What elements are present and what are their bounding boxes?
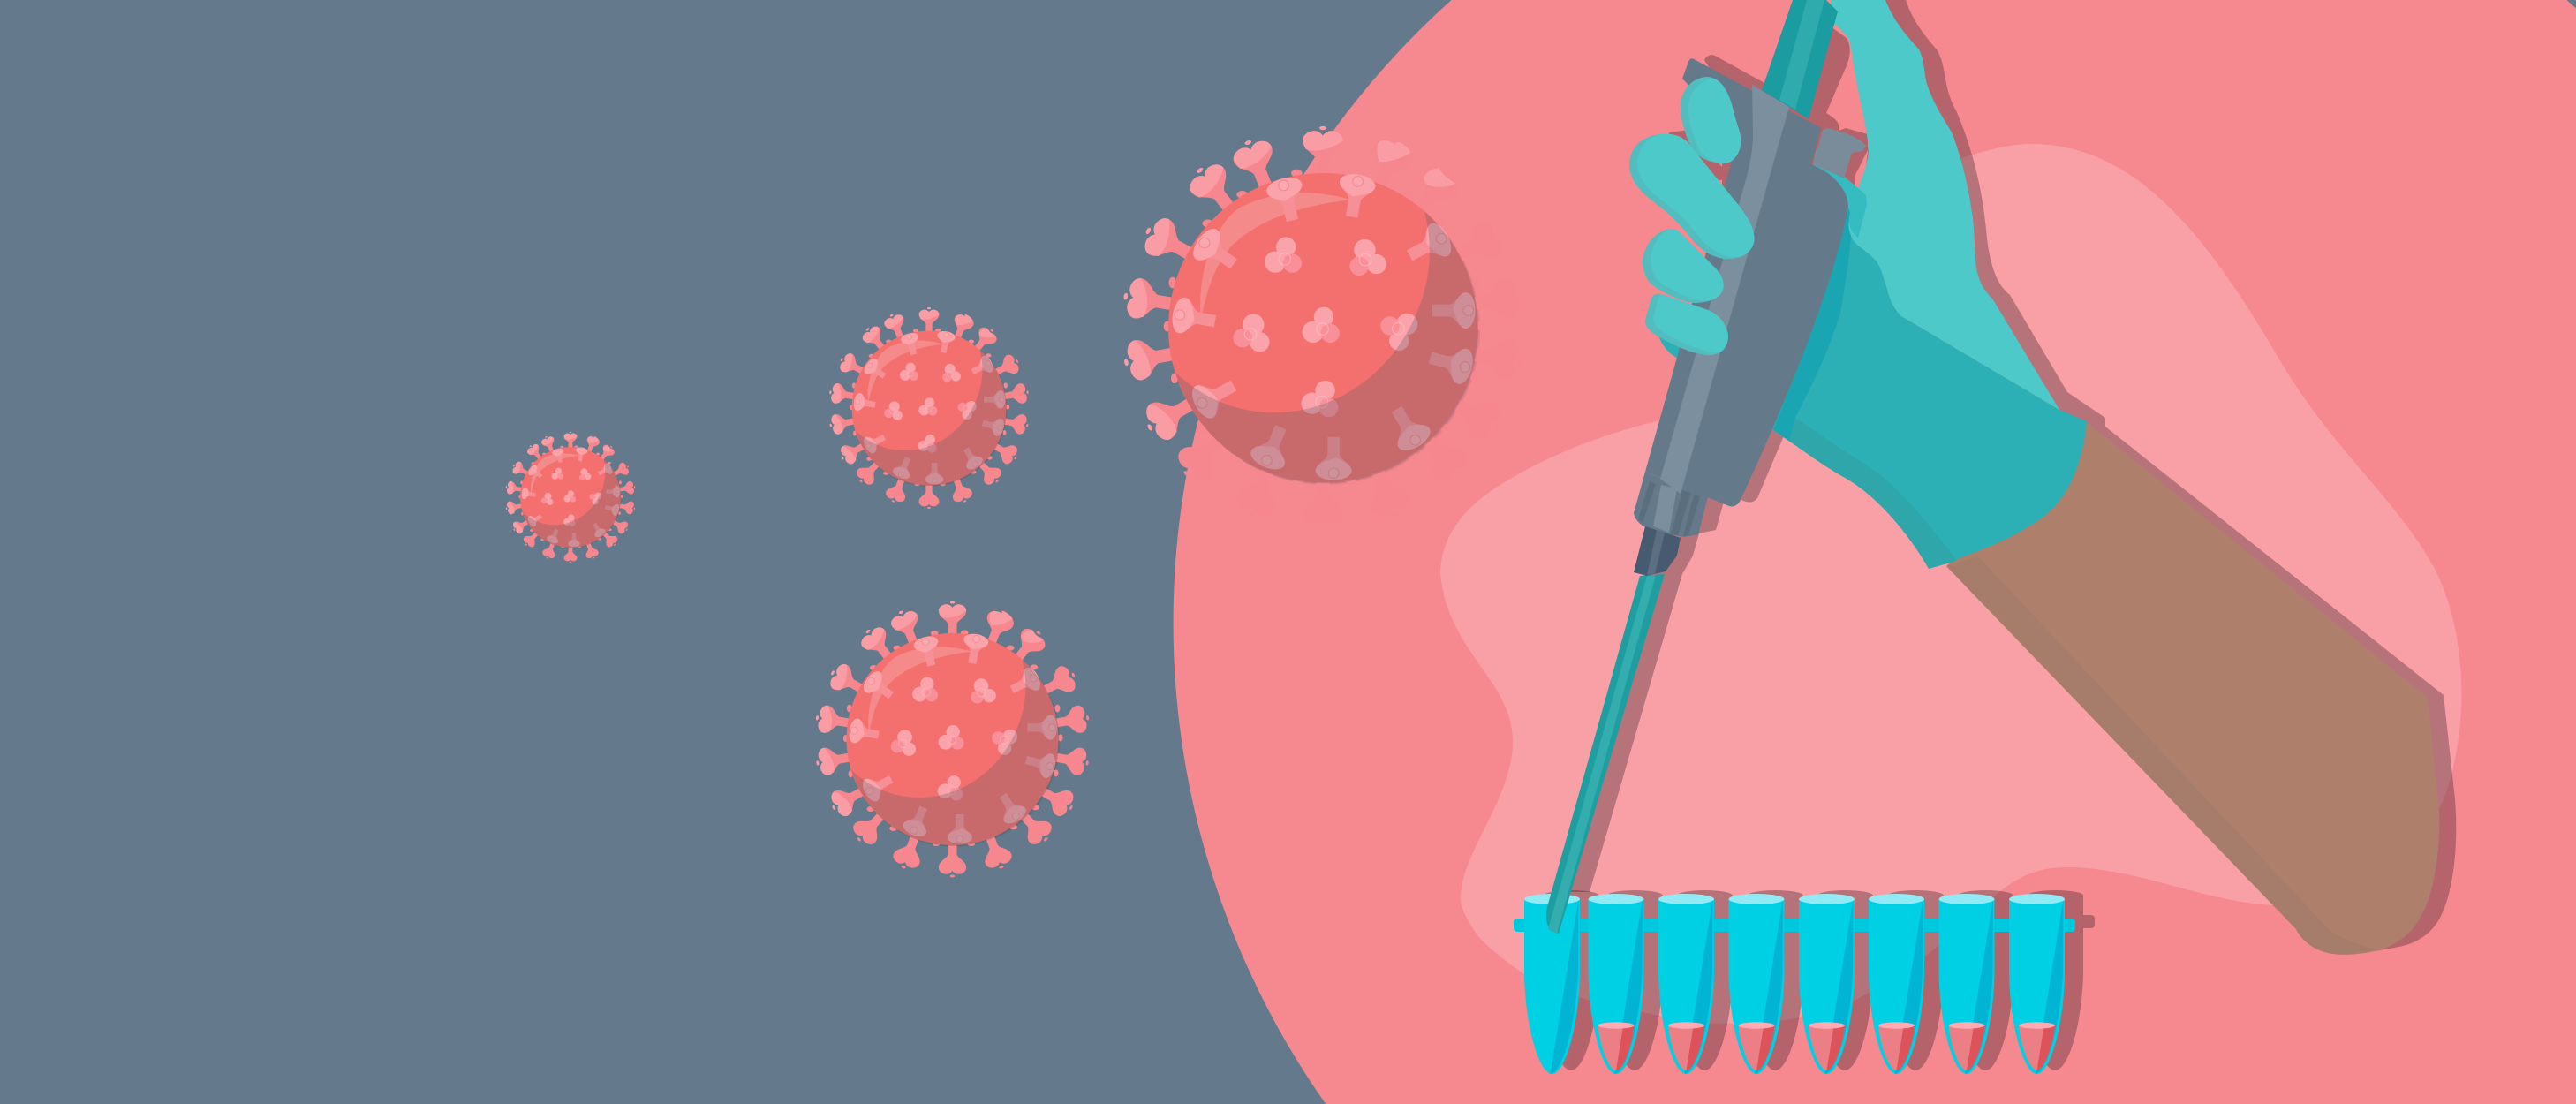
pipette: top shaft [1762, 0, 1838, 119]
tube 3 [1658, 894, 1714, 1074]
finger: middle [1629, 134, 1754, 260]
rack bar [1514, 919, 2075, 932]
hand and pipette shadow [1565, 0, 2456, 951]
tube 4 [1729, 894, 1784, 1074]
finger: index [1680, 77, 1741, 164]
virus: smallest [505, 432, 636, 563]
finger: little [1644, 293, 1728, 355]
glove: lower shade [1771, 418, 1957, 569]
glove [1658, 0, 2087, 569]
virus: largest [1121, 126, 1525, 529]
tube shadows [1537, 890, 2095, 1070]
pipette: light strip [1660, 85, 1789, 494]
pipette tip [1546, 574, 1665, 934]
tube 6 [1869, 894, 1924, 1074]
tube 8 [2009, 894, 2065, 1074]
glove: palm wrap [1658, 336, 1700, 359]
tube 5 [1799, 894, 1855, 1074]
pipette: plunger stub [1813, 128, 1866, 178]
glove: thumb light [1831, 0, 2059, 410]
virus: medium lower [813, 601, 1092, 877]
glove: shade behind pipette [1773, 208, 1851, 441]
glove: palm dark [1771, 199, 2087, 569]
tube strip [1514, 894, 2075, 1074]
arm [1946, 422, 2439, 955]
pipette: collar [1634, 472, 1708, 537]
fingers [1629, 77, 1754, 355]
tube 7 [1939, 894, 1994, 1074]
pipette [1634, 0, 1866, 576]
virus: medium upper [828, 307, 1030, 509]
pipette: main body [1645, 58, 1848, 506]
glove: teal fold under plunger [1812, 149, 1867, 238]
tube 1 (empty) [1524, 894, 1580, 1074]
tube 2 [1588, 894, 1644, 1074]
finger: ring [1643, 229, 1724, 303]
pipette: dark nozzle [1634, 526, 1681, 576]
light blob [1440, 144, 2461, 1024]
pink circle panel [1174, 0, 2576, 1104]
